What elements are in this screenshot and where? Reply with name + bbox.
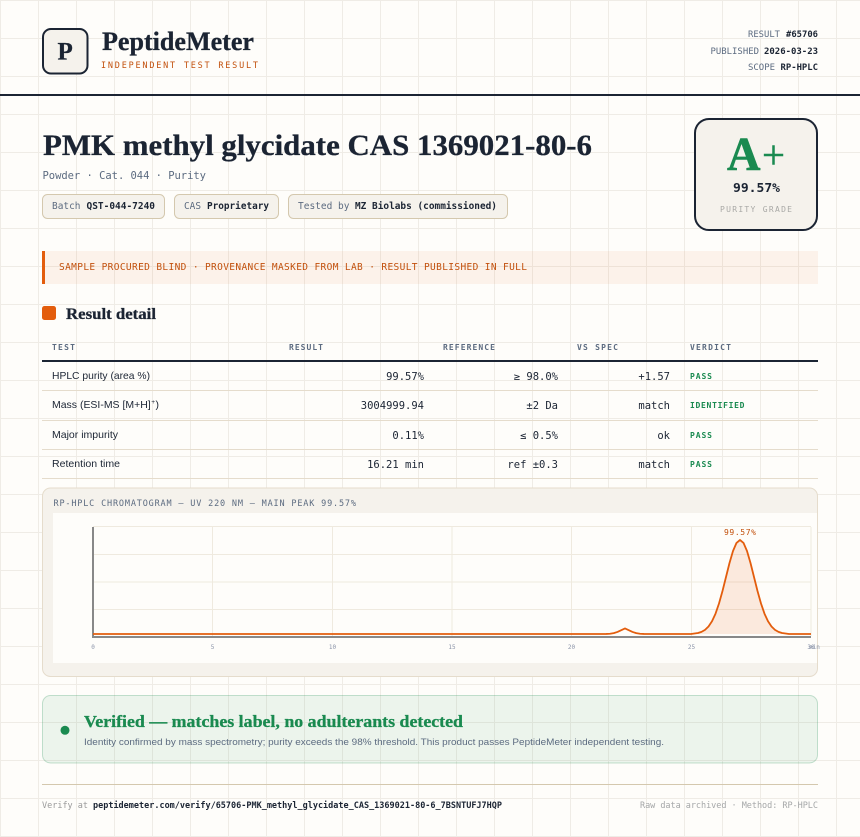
row: major impurity: ≤ 0.5% bbox=[520, 430, 559, 442]
notice banner bbox=[42, 251, 818, 284]
verified callout bbox=[42, 696, 818, 763]
icon: logo mark bbox=[43, 29, 88, 74]
result metadata: PUBLISHED bbox=[710, 47, 759, 57]
verify link: Verify at bbox=[42, 801, 88, 811]
x axis labels: 20 bbox=[568, 644, 575, 651]
grade plus: + bbox=[762, 132, 785, 178]
brand name: PeptideMeter bbox=[102, 27, 254, 56]
row: mass: match bbox=[638, 400, 670, 412]
row: major impurity: ok bbox=[657, 430, 671, 442]
row: retention time: ref ±0.3 bbox=[507, 459, 558, 471]
row: major impurity: PASS bbox=[690, 431, 712, 440]
row: mass: + bbox=[151, 399, 155, 406]
row: mass: IDENTIFIED bbox=[690, 401, 745, 410]
row: mass: ) bbox=[156, 399, 159, 411]
row: major impurity bbox=[52, 429, 712, 442]
row: HPLC purity: 99.57% bbox=[386, 371, 425, 383]
table header: VERDICT bbox=[690, 343, 731, 352]
x axis labels: min bbox=[809, 644, 820, 651]
row: HPLC purity: +1.57 bbox=[638, 371, 670, 383]
chip: tested by: Tested by bbox=[298, 201, 350, 212]
row: mass bbox=[52, 399, 745, 412]
table header: VS SPEC bbox=[577, 343, 618, 352]
result metadata: #65706 bbox=[786, 30, 818, 40]
row: mass: 3004999.94 bbox=[361, 400, 424, 412]
icon: status dot bbox=[60, 726, 70, 735]
result metadata: SCOPE bbox=[748, 63, 775, 73]
grade card bbox=[695, 119, 817, 230]
row: major impurity: Major impurity bbox=[52, 429, 119, 441]
table header: RESULT bbox=[289, 343, 323, 352]
chip: batch bbox=[42, 194, 164, 218]
chromatogram chart bbox=[53, 513, 820, 663]
row: HPLC purity: PASS bbox=[690, 372, 712, 381]
result metadata: RP-HPLC bbox=[780, 63, 818, 73]
row: retention time: Retention time bbox=[52, 458, 120, 470]
row: major impurity: 0.11% bbox=[392, 430, 425, 442]
x axis labels: 25 bbox=[688, 644, 695, 651]
row: retention time: 16.21 min bbox=[367, 459, 424, 471]
grade letter: A bbox=[727, 128, 761, 181]
chip: CAS: Proprietary bbox=[207, 201, 269, 212]
result metadata bbox=[710, 30, 818, 73]
x axis labels: 10 bbox=[329, 644, 336, 651]
section heading: Result detail bbox=[66, 306, 157, 323]
x axis labels: 5 bbox=[211, 644, 215, 651]
results table bbox=[42, 343, 818, 479]
row: HPLC purity: ≥ 98.0% bbox=[514, 371, 559, 383]
footer bbox=[42, 800, 818, 811]
callout body: Identity confirmed by mass spectrometry; purity exceeds the 98% threshold. This product passes PeptideMeter independent testing. bbox=[84, 737, 664, 748]
chip: batch: Batch bbox=[52, 201, 80, 212]
chip: CAS: CAS bbox=[184, 201, 201, 212]
brand tagline: INDEPENDENT TEST RESULT bbox=[101, 61, 258, 71]
product subtitle: Powder · Cat. 044 · Purity bbox=[42, 170, 206, 182]
chip: batch: QST-044-7240 bbox=[86, 201, 155, 212]
row: retention time bbox=[52, 458, 712, 471]
row: retention time: match bbox=[638, 459, 670, 471]
chip: tested by: MZ Biolabs (commissioned) bbox=[355, 201, 497, 212]
row: HPLC purity bbox=[52, 370, 712, 383]
peak area bbox=[691, 540, 789, 634]
row: retention time: PASS bbox=[690, 460, 712, 469]
axes bbox=[93, 527, 811, 637]
table header: TEST bbox=[52, 343, 75, 352]
chart title: RP-HPLC CHROMATOGRAM — UV 220 NM — MAIN PEAK 99.57% bbox=[54, 499, 356, 509]
callout heading: Verified — matches label, no adulterants detected bbox=[84, 712, 464, 731]
row: HPLC purity: HPLC purity (area %) bbox=[52, 370, 150, 382]
trace line bbox=[93, 540, 811, 634]
row: mass: Mass (ESI-MS [M+H] bbox=[52, 399, 151, 411]
table header bbox=[52, 343, 731, 352]
x axis labels: 30 bbox=[807, 644, 815, 651]
chip: CAS bbox=[174, 194, 278, 218]
product title: PMK methyl glycidate CAS 1369021-80-6 bbox=[43, 129, 592, 162]
row: mass: ±2 Da bbox=[526, 400, 558, 412]
notice banner: SAMPLE PROCURED BLIND · PROVENANCE MASKED FROM LAB · RESULT PUBLISHED IN FULL bbox=[59, 262, 527, 273]
peak label: 99.57% bbox=[724, 528, 756, 537]
x axis labels: 0 bbox=[91, 644, 95, 651]
result metadata: RESULT bbox=[748, 30, 781, 40]
archive note: Raw data archived · Method: RP-HPLC bbox=[640, 801, 818, 811]
verify link: peptidemeter.com/verify/65706-PMK_methyl_glycidate_CAS_1369021-80-6_7BSNTUFJ7HQP bbox=[93, 800, 502, 811]
header bbox=[43, 27, 818, 74]
chip: tested by bbox=[288, 194, 508, 218]
table header: REFERENCE bbox=[443, 343, 495, 352]
result metadata: 2026-03-23 bbox=[764, 47, 818, 57]
x axis labels bbox=[91, 644, 820, 651]
x axis labels: 15 bbox=[448, 644, 456, 651]
icon: logo mark: P bbox=[58, 38, 73, 65]
chart panel bbox=[42, 488, 820, 676]
grade percent: 99.57% bbox=[733, 180, 780, 195]
grade caption: PURITY GRADE bbox=[720, 205, 792, 214]
